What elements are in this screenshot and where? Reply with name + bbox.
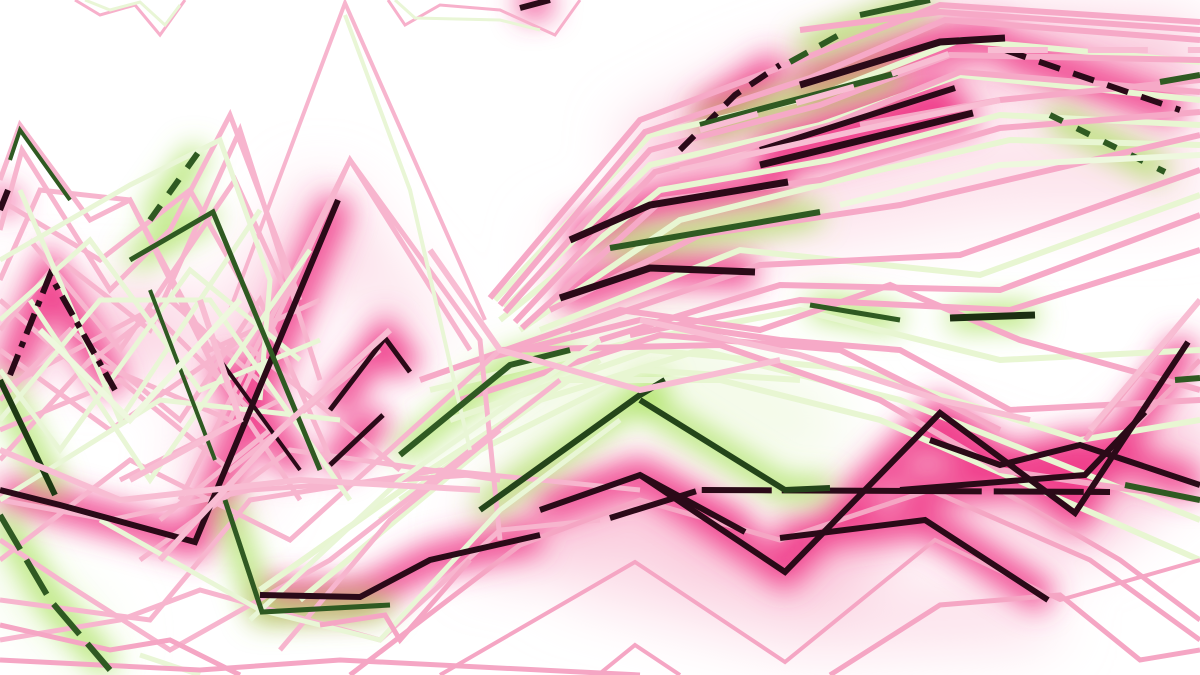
- pale green lines: left cluster: [0, 15, 620, 675]
- pale pink line bundle: upper right waves: [420, 5, 1200, 500]
- pale green line bundle: upper right waves: [260, 40, 1200, 600]
- pale strokes crossing over the dark lines: [0, 50, 1200, 560]
- pale lines: left cluster: [0, 3, 640, 650]
- top fragments: [75, 0, 580, 35]
- pink lines: lower waves: [0, 300, 1200, 675]
